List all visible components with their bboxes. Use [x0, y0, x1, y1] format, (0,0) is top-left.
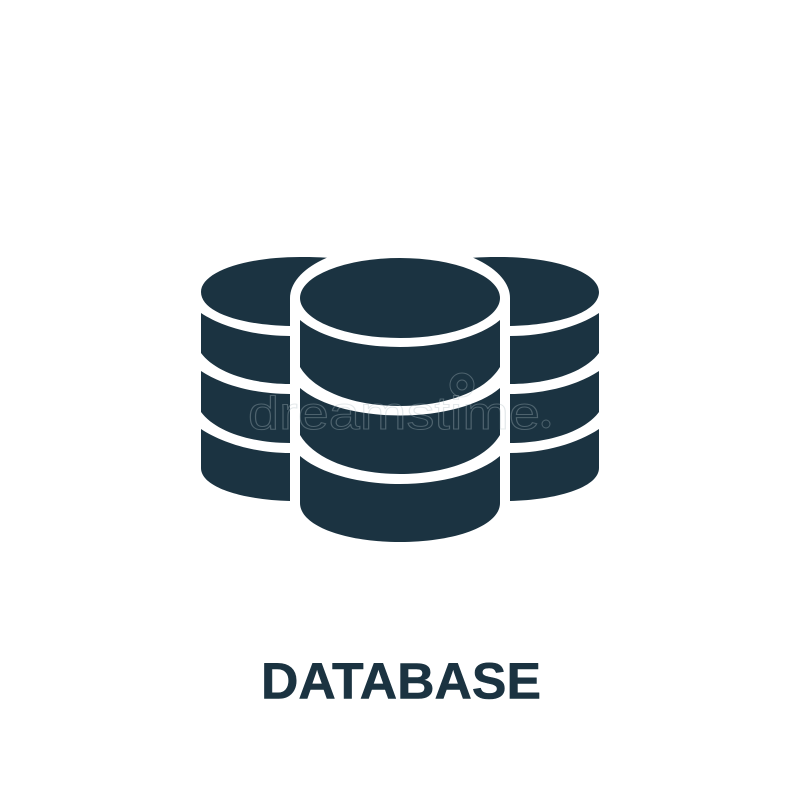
- title: DATABASE: [261, 652, 541, 710]
- watermark: dreamstime: [248, 387, 540, 439]
- white separator around centre cylinder: [290, 244, 510, 558]
- centre cylinder: [300, 258, 500, 542]
- icon: database stacks: [201, 244, 599, 558]
- right cylinder: [470, 257, 599, 501]
- watermark: [248, 373, 550, 439]
- left cylinder: [201, 257, 330, 501]
